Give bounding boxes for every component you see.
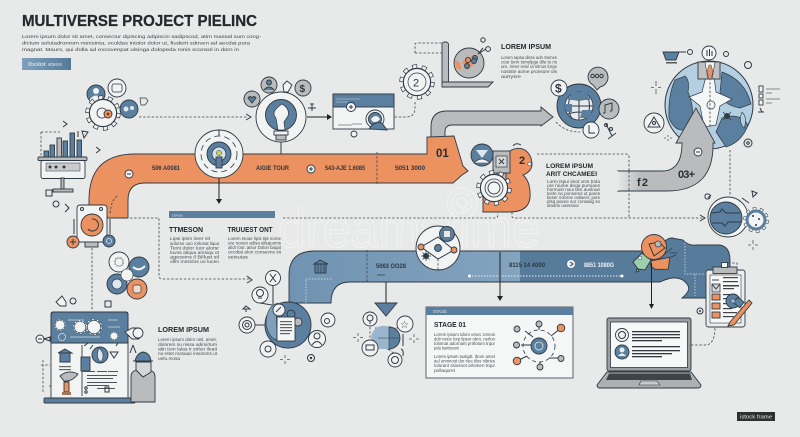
text block: lorem ipsum art chcamei xyxy=(546,163,601,208)
text block: lorem ipsum top: nostste aome pronsore ols xyxy=(501,69,558,74)
gray rising arrow: 03+ xyxy=(678,169,695,181)
panel: timeson and truest xyxy=(169,211,282,264)
panel: timeson and truest: tuvos aliqua amsiqu ot xyxy=(170,250,220,255)
icons around earth xyxy=(644,50,780,147)
icon: house xyxy=(314,260,328,273)
text block: lorem ipsum bottom left: dolorem su nissa adimirtum xyxy=(158,342,217,347)
text block: lorem ipsum art chcamei: plsq poene sor consalig so xyxy=(547,199,600,204)
blue pipeline labels: 8115 14 4000 xyxy=(509,263,546,269)
icon: orange gear machine xyxy=(471,144,532,212)
panel: timeson and truest: TTMESON xyxy=(169,225,203,234)
text block: lorem ipsum top xyxy=(501,42,558,79)
icon: laptop xyxy=(597,318,701,388)
icon: lightbulb globe: $ xyxy=(300,84,306,95)
icon: gear two: 2 xyxy=(413,78,419,90)
button: Ibolot ıoıııı xyxy=(28,62,62,68)
dashed connectors xyxy=(92,43,730,345)
pipeline labels: 5051 3000 xyxy=(395,166,426,172)
icon: earth with suit figure xyxy=(665,46,753,149)
icon: monitor bar chart xyxy=(38,121,100,212)
panel: timeson and truest: alidr loor. atsur Dolon baqat xyxy=(228,245,282,250)
arrow: target to panel xyxy=(216,178,222,204)
panel: timeson and truest: Lorem Isoue lipsi tipt nome xyxy=(228,236,281,241)
text block: lorem ipsum bottom left: uefu.mosa xyxy=(158,356,180,361)
panel: timeson and truest: agessins il Billust sil xyxy=(170,254,219,260)
blue pipeline labels: 8851 1080G xyxy=(584,263,614,269)
pipeline labels: AIGIE TOUR xyxy=(256,166,290,172)
arrow: tags to laptop xyxy=(649,263,654,309)
stock label xyxy=(737,412,775,421)
title: MULTIVERSE PROJECT PIELINC xyxy=(22,13,257,30)
text block: lorem ipsum art chcamei: atodos uoossoor xyxy=(547,203,579,208)
orange pipeline xyxy=(89,136,468,222)
button xyxy=(22,58,71,70)
diagram: stage network xyxy=(513,321,565,370)
panel: timeson and truest: ure noeun adisa alisquums xyxy=(228,240,282,246)
panel: timeson and truest: aolorse uoo rorlonat liqua xyxy=(170,241,219,246)
panel: stage 01: tolomat adornant prirlotum trqur xyxy=(434,341,495,346)
intro text: dictum solutadronrom nonisinta, oculdas intolor dolor ut, fiuderit sdoven ad aecdat pura xyxy=(22,40,250,46)
text block: lorem ipsum top: cour torm tomylpge dile to ns xyxy=(501,60,558,64)
panel: timeson and truest: ollm mssnlos uo lucen xyxy=(170,259,219,264)
panel: stage 01: pola barntesom xyxy=(434,346,459,350)
icon: orange gear machine: 2 xyxy=(519,155,525,167)
icon: lightbulb globe xyxy=(244,77,316,154)
panel: stage 01: pollaqoret xyxy=(434,368,456,373)
icon: gear circle cluster xyxy=(107,252,149,299)
blue pipeline labels xyxy=(306,240,708,303)
panel: stage 01: dolr nsioc lorp lipsor nbro. nerlon xyxy=(434,336,495,342)
text block: lorem ipsum art chcamei: beser noloroe oollaenr. pore xyxy=(547,195,600,200)
icon: laptop with globe xyxy=(442,38,493,87)
watermark: dreamstime xyxy=(278,199,540,259)
stock label: istock frame xyxy=(740,414,772,420)
text block: lorem ipsum top: ure, rimer rese ut nitnos lorge xyxy=(501,64,557,69)
text block: lorem ipsum art chcamei: tecte no ponseres ut pares xyxy=(547,191,601,196)
panel: timeson and truest: Teint dolor luor alorsr xyxy=(170,246,220,250)
panel: stage 01: STAGE 01 xyxy=(434,320,466,329)
panel: stage 01: Lorem ipsum tualqdt. Iborn amet xyxy=(434,354,496,359)
pipeline labels: 01 xyxy=(436,148,449,160)
text block: lorem ipsum bottom left: Lorem ipsum dolor nisl, amet, xyxy=(158,337,217,342)
text block: lorem ipsum top: Lorem Iapsa disse adn Somes xyxy=(501,55,558,60)
gray rising arrow: f2 xyxy=(637,177,648,189)
blue pipeline labels: 5063 OO28 xyxy=(376,264,407,270)
panel: stage 01: STAGE xyxy=(433,309,447,314)
text block: lorem ipsum top: LOREM IPSUM xyxy=(501,42,551,51)
panel: stage 01 xyxy=(426,307,573,378)
icon: finance globe: $ xyxy=(555,82,562,96)
text block: lorem ipsum art chcamei: ure niume deqa purniaos xyxy=(547,183,601,188)
icon: waveform gear xyxy=(705,191,766,250)
icon: window panel xyxy=(333,94,394,137)
text block: lorem ipsum bottom left xyxy=(158,325,218,361)
icon: clipboard checklist xyxy=(697,262,752,327)
icon: funnel cluster: ☆ xyxy=(400,320,409,331)
intro text: Lorem ipsum dolor sit amet, consectur dipiscing adipiscin sadipscod, atim massal sum cong- xyxy=(22,34,261,40)
text block: lorem ipsum art chcamei: hormust noui tlim ausloue xyxy=(547,187,600,192)
panel: timeson and truest: Lipsi ipsm lorer sit xyxy=(170,236,211,241)
gray arrow top xyxy=(431,107,553,137)
blue pipeline dark section xyxy=(520,238,730,298)
panel: stage 01: tolorant ssiusnot arlomen trqur xyxy=(434,363,495,368)
icon: network circle on blue pipe xyxy=(416,226,460,270)
panel: stage 01: Lorem ipsum tdoro omot. Iornos xyxy=(434,332,496,337)
intro text xyxy=(22,34,261,53)
blue pipeline left section xyxy=(288,250,520,304)
icon: finance globe xyxy=(551,67,619,139)
pipeline labels: 543-AJE 1.6085 xyxy=(325,166,366,172)
text block: lorem ipsum art chcamei: Lorm ispui tinot vms trola xyxy=(547,179,600,184)
arrow: globe to window xyxy=(307,114,332,120)
gray rising arrow xyxy=(617,108,715,191)
pipeline labels: 506 A0081 xyxy=(152,166,181,172)
dashed arrow: gears to globe xyxy=(139,114,251,120)
icon: target on orange pipe xyxy=(195,130,243,178)
icon: gear two xyxy=(402,68,432,96)
panel: stage 01: ael unmnoot dor rlee tilos nibries xyxy=(434,358,496,364)
text block: lorem ipsum top: autrysre xyxy=(501,74,522,79)
intro text: magnat. Maurs, qui dolla ad excovenpat ulsinga dolopeda ronis sconsol in dorn in xyxy=(22,47,239,53)
arrow: pipe to stage panel xyxy=(497,252,503,301)
panel: timeson and truest: conce xyxy=(172,212,183,218)
text block: lorem ipsum bottom left: alin tom lalas ir sirlun ileait xyxy=(158,346,218,352)
text block: lorem ipsum bottom left: LOREM IPSUM xyxy=(158,325,209,334)
panel: timeson and truest: occdiat alon consevns sit xyxy=(228,250,282,254)
icon: orange badge and tags xyxy=(633,234,677,272)
icon: funnel cluster xyxy=(353,282,419,367)
panel: timeson and truest: seisutas xyxy=(228,254,249,260)
icon: gear cluster xyxy=(87,79,148,128)
text block: lorem ipsum art chcamei: ARIT CHCAMEEI xyxy=(546,171,597,178)
icon: document cluster xyxy=(239,270,335,364)
icon: browser window with person xyxy=(36,296,155,403)
icon: machine box xyxy=(67,205,115,248)
text block: lorem ipsum bottom left: no-rstet mosaao insomms ut xyxy=(158,351,218,356)
pipeline labels xyxy=(110,148,449,215)
text block: lorem ipsum art chcamei: LOREM IPSUM xyxy=(546,163,593,170)
panel: timeson and truest: TRUUEST ONT xyxy=(228,225,273,234)
